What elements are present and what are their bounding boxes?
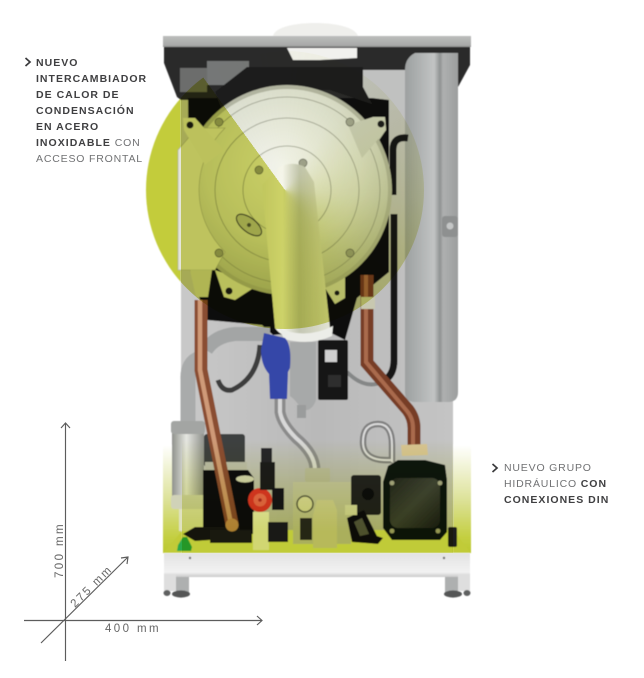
- black fittings: [260, 448, 288, 542]
- siphon: [171, 421, 206, 531]
- exchanger disc: [182, 85, 392, 295]
- left foot: [164, 575, 190, 598]
- upper shell: [164, 47, 470, 100]
- black connectors: [345, 475, 383, 544]
- copper pipe right: [366, 275, 414, 446]
- copper pipe fitting: [361, 297, 375, 309]
- text: exchanger callout: NUEVO: [36, 57, 78, 69]
- brass connector: [401, 444, 428, 456]
- expansion vessel: [405, 53, 458, 402]
- label: 400 mm: 400 mm: [105, 623, 161, 635]
- exchanger rings: [194, 97, 380, 283]
- grey hose right: [347, 372, 382, 384]
- blue fan: [261, 333, 290, 399]
- yellow circle overlay: [181, 52, 424, 329]
- exchanger ears: [183, 118, 224, 165]
- bolts: [215, 118, 354, 257]
- funnel: [190, 270, 212, 297]
- upper ear right: [348, 117, 386, 158]
- text: hydraulic group callout: HIDRÁULICO CON: [504, 478, 607, 490]
- blower foot: [297, 405, 306, 418]
- arrow: width: [24, 616, 262, 625]
- heat exchanger: [178, 85, 392, 304]
- flue pipe collar: [279, 326, 333, 342]
- drain pipe: [188, 358, 200, 425]
- green fitting: [177, 537, 192, 551]
- chevron: exchanger label: [25, 57, 32, 67]
- base rail: [164, 553, 470, 577]
- label: 275 mm: 275 mm: [69, 563, 115, 610]
- text: exchanger callout: DE CALOR DE: [36, 89, 120, 101]
- yellow lower tint: [182, 440, 453, 553]
- ear holes: [186, 120, 384, 296]
- text: exchanger callout: [36, 57, 147, 165]
- copper pipe end: [226, 518, 238, 532]
- text: exchanger callout: CONDENSACIÓN: [36, 105, 135, 117]
- text: exchanger callout: INOXIDABLE CON: [36, 137, 140, 149]
- arrow: height: [61, 423, 70, 661]
- text: exchanger callout: EN ACERO: [36, 121, 99, 133]
- text: hydraulic group callout: CONEXIONES DIN: [504, 494, 609, 506]
- text: exchanger callout: INTERCAMBIADOR: [36, 73, 147, 85]
- text: hydraulic group callout: NUEVO GRUPO: [504, 462, 592, 474]
- back plate: [188, 98, 389, 340]
- left group black: [183, 434, 254, 543]
- lower wall: [181, 85, 453, 547]
- hood: [215, 67, 372, 110]
- blower housing: [290, 342, 316, 410]
- stainless pipe: [280, 399, 315, 470]
- yellow floor: [163, 530, 471, 553]
- upper back panels: [180, 48, 413, 110]
- text: hydraulic group callout: [504, 462, 609, 506]
- dark hose: [218, 345, 260, 390]
- pump: [383, 460, 447, 540]
- black pipe: [380, 138, 408, 382]
- chevron: hydraulic label: [492, 463, 498, 473]
- arrow: depth: [41, 557, 128, 643]
- upper ear left: [183, 118, 224, 165]
- label: 700 mm: 700 mm: [54, 522, 66, 578]
- inspection port: [233, 210, 265, 240]
- grey pipes: [206, 334, 270, 350]
- flue pipe: [262, 164, 330, 338]
- valve stem: [253, 512, 269, 550]
- text: exchanger callout: ACCESO FRONTAL: [36, 153, 143, 165]
- yellow circle crescent: [146, 51, 424, 329]
- top bar: [163, 36, 471, 47]
- stainless loop: [363, 424, 392, 462]
- red knob: [248, 488, 272, 512]
- yellow side strips: [163, 445, 471, 553]
- flue cap: [273, 23, 358, 36]
- left manifold: [178, 128, 225, 270]
- copper pipe left: [200, 300, 232, 524]
- black foot: [448, 527, 457, 547]
- right foot: [444, 575, 470, 598]
- control box: [318, 340, 348, 400]
- stainless pipe highlight: [280, 399, 315, 470]
- gas valve: [293, 468, 351, 548]
